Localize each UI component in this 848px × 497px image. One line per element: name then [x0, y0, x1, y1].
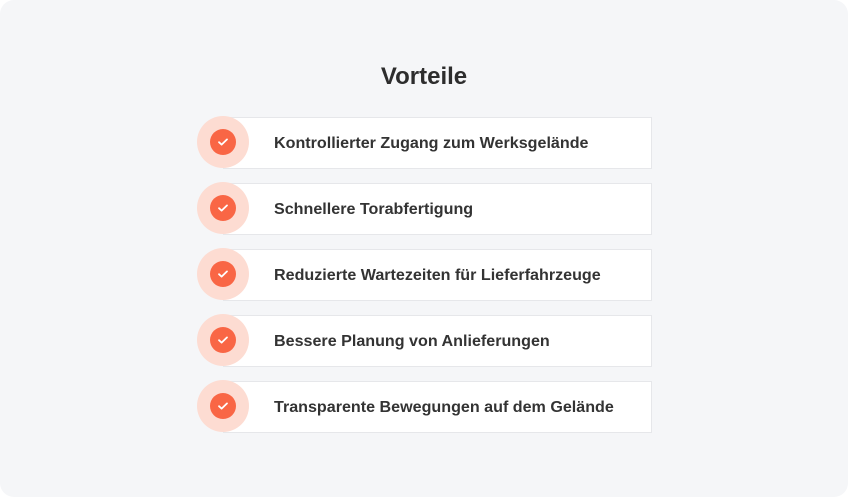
row 5: Transparente Bewegungen auf dem Gelände [274, 398, 614, 416]
icon: check 1 [197, 116, 249, 168]
row 5 [223, 381, 652, 433]
row 2 [223, 183, 652, 235]
title: Vorteile [381, 63, 467, 90]
row 2: Schnellere Torabfertigung [274, 200, 473, 218]
row 4 [223, 315, 652, 367]
icon: check 2 [197, 182, 249, 234]
row 4: Bessere Planung von Anlieferungen [274, 332, 550, 350]
icon: check 5 [197, 380, 249, 432]
icon: check 3 [197, 248, 249, 300]
row 1 [223, 117, 652, 169]
icon: check 4 [197, 314, 249, 366]
row 3: Reduzierte Wartezeiten für Lieferfahrzeuge [274, 266, 601, 284]
row 3 [223, 249, 652, 301]
row 1: Kontrollierter Zugang zum Werksgelände [274, 134, 588, 152]
